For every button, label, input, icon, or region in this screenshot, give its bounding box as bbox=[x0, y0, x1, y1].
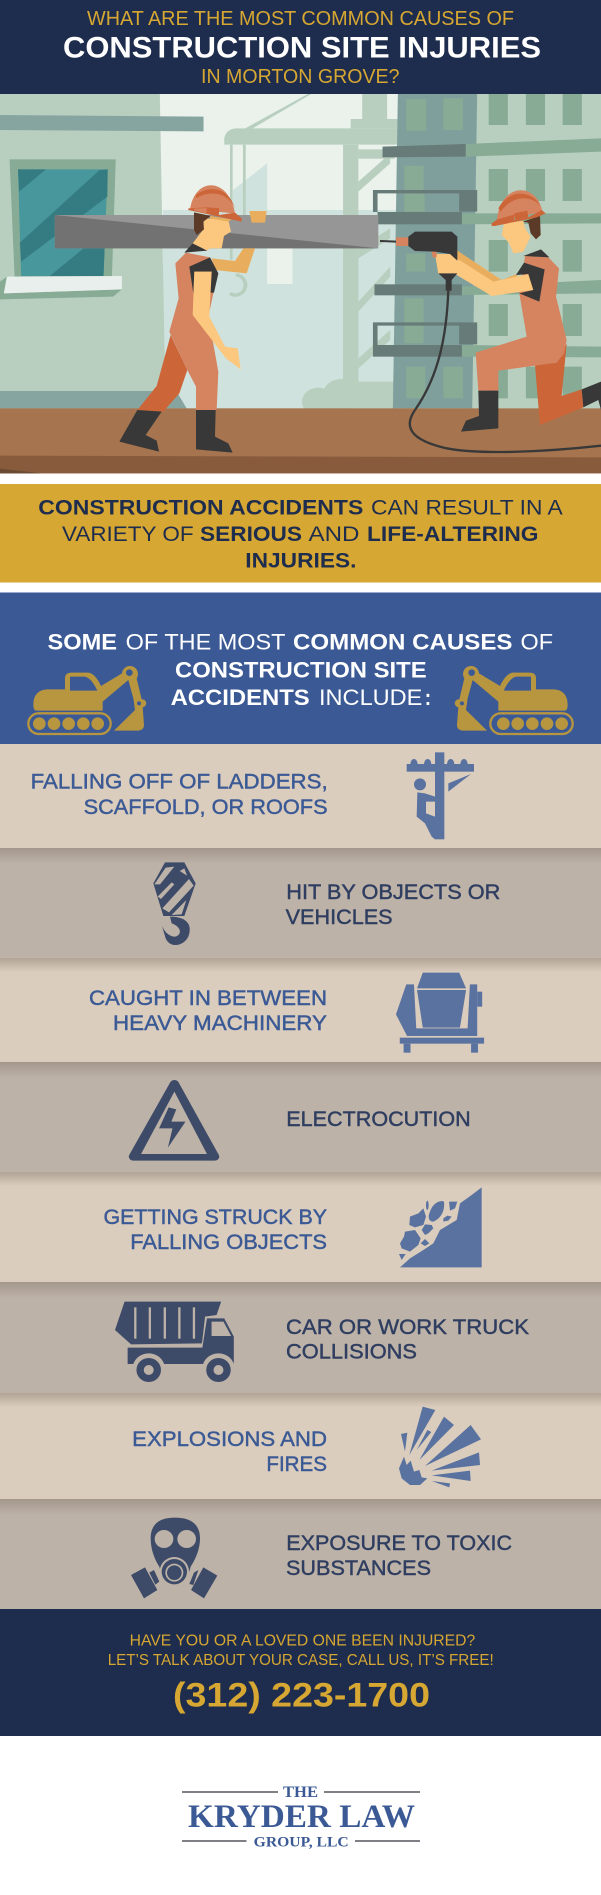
icon: gas mask bbox=[131, 1518, 217, 1598]
call to action footer bbox=[0, 1609, 601, 1736]
row: falling bbox=[0, 744, 601, 848]
blue section heading bbox=[0, 592, 601, 744]
row: falling: FALLING OFF OF LADDERS, bbox=[31, 770, 328, 793]
drill bbox=[380, 232, 457, 291]
call to action footer: (312) 223-1700 bbox=[173, 1676, 430, 1714]
row: electrocution: ELECTROCUTION bbox=[286, 1108, 471, 1131]
row: hit by objects: HIT BY OBJECTS OR bbox=[286, 881, 500, 904]
header banner bbox=[0, 0, 601, 94]
row: toxic substances bbox=[0, 1499, 601, 1609]
blue section heading: OF THE MOST bbox=[126, 629, 286, 654]
illustration: two construction workers carrying a beam and drilling bbox=[0, 94, 601, 473]
row: caught in machinery: CAUGHT IN BETWEEN bbox=[89, 987, 327, 1010]
header banner: CONSTRUCTION SITE INJURIES bbox=[63, 32, 541, 64]
icon: dump truck bbox=[115, 1302, 235, 1383]
blue section heading: INCLUDE bbox=[319, 685, 422, 710]
crane bbox=[224, 94, 399, 416]
logo: The Kryder Law Group, LLC: THE bbox=[283, 1784, 318, 1801]
gold statement band: CAN RESULT IN A bbox=[371, 496, 563, 520]
icon: explosion burst bbox=[399, 1407, 481, 1487]
icon: rockslide bbox=[399, 1187, 482, 1267]
icon: cement mixer bbox=[396, 973, 484, 1053]
logo: The Kryder Law Group, LLC: GROUP, LLC bbox=[254, 1835, 349, 1851]
row: toxic substances: EXPOSURE TO TOXIC bbox=[286, 1532, 512, 1555]
logo: The Kryder Law Group, LLC bbox=[182, 1784, 420, 1851]
row: caught in machinery: HEAVY MACHINERY bbox=[113, 1012, 327, 1035]
row: truck collisions: CAR OR WORK TRUCK bbox=[286, 1316, 529, 1339]
gold statement band: INJURIES. bbox=[245, 549, 356, 573]
icon: worker climbing utility pole bbox=[407, 752, 474, 839]
gold statement band: VARIETY OF bbox=[62, 522, 194, 546]
right building with scaffolding bbox=[373, 94, 601, 408]
blue section heading: CONSTRUCTION SITE bbox=[175, 657, 427, 682]
call to action footer: LET’S TALK ABOUT YOUR CASE, CALL US, IT’S FREE! bbox=[108, 1652, 494, 1669]
header banner: IN MORTON GROVE? bbox=[201, 66, 400, 88]
row: truck collisions bbox=[0, 1282, 601, 1393]
logo: The Kryder Law Group, LLC: KRYDER LAW bbox=[188, 1799, 415, 1835]
row: hit by objects bbox=[0, 848, 601, 958]
blue section heading: ACCIDENTS bbox=[171, 685, 310, 710]
gold statement band: AND bbox=[308, 522, 360, 546]
row: truck collisions: COLLISIONS bbox=[286, 1341, 417, 1364]
blue section heading: SOME bbox=[48, 629, 117, 654]
icon: excavator right bbox=[455, 666, 573, 734]
ground bbox=[0, 408, 601, 473]
steel beam bbox=[55, 215, 378, 248]
worker drilling bbox=[380, 190, 601, 452]
gold statement band: LIFE-ALTERING bbox=[367, 522, 538, 546]
row: caught in machinery bbox=[0, 958, 601, 1062]
row: electrocution bbox=[0, 1062, 601, 1172]
blue section heading: : bbox=[425, 685, 431, 710]
header banner: WHAT ARE THE MOST COMMON CAUSES OF bbox=[87, 8, 514, 30]
blue section heading: COMMON CAUSES bbox=[293, 629, 512, 654]
icon: excavator left bbox=[28, 666, 146, 734]
row: hit by objects: VEHICLES bbox=[286, 906, 393, 929]
row: explosions: FIRES bbox=[266, 1453, 327, 1476]
gold statement band: CONSTRUCTION ACCIDENTS bbox=[38, 496, 363, 520]
row: falling: SCAFFOLD, OR ROOFS bbox=[84, 796, 328, 819]
gold statement band bbox=[0, 484, 601, 582]
blue section heading: OF bbox=[520, 629, 553, 654]
icon: electric hazard triangle bbox=[133, 1084, 215, 1157]
icon: crane hook bbox=[153, 862, 196, 945]
left building bbox=[0, 94, 204, 408]
worker carrying beam bbox=[119, 185, 267, 453]
row: falling objects: GETTING STRUCK BY bbox=[104, 1206, 327, 1229]
row: falling objects bbox=[0, 1172, 601, 1282]
call to action footer: HAVE YOU OR A LOVED ONE BEEN INJURED? bbox=[130, 1632, 476, 1650]
row: explosions bbox=[0, 1393, 601, 1499]
row: falling objects: FALLING OBJECTS bbox=[130, 1231, 327, 1254]
row: explosions: EXPLOSIONS AND bbox=[132, 1428, 327, 1451]
row: toxic substances: SUBSTANCES bbox=[286, 1557, 431, 1580]
gold statement band: SERIOUS bbox=[200, 522, 302, 546]
